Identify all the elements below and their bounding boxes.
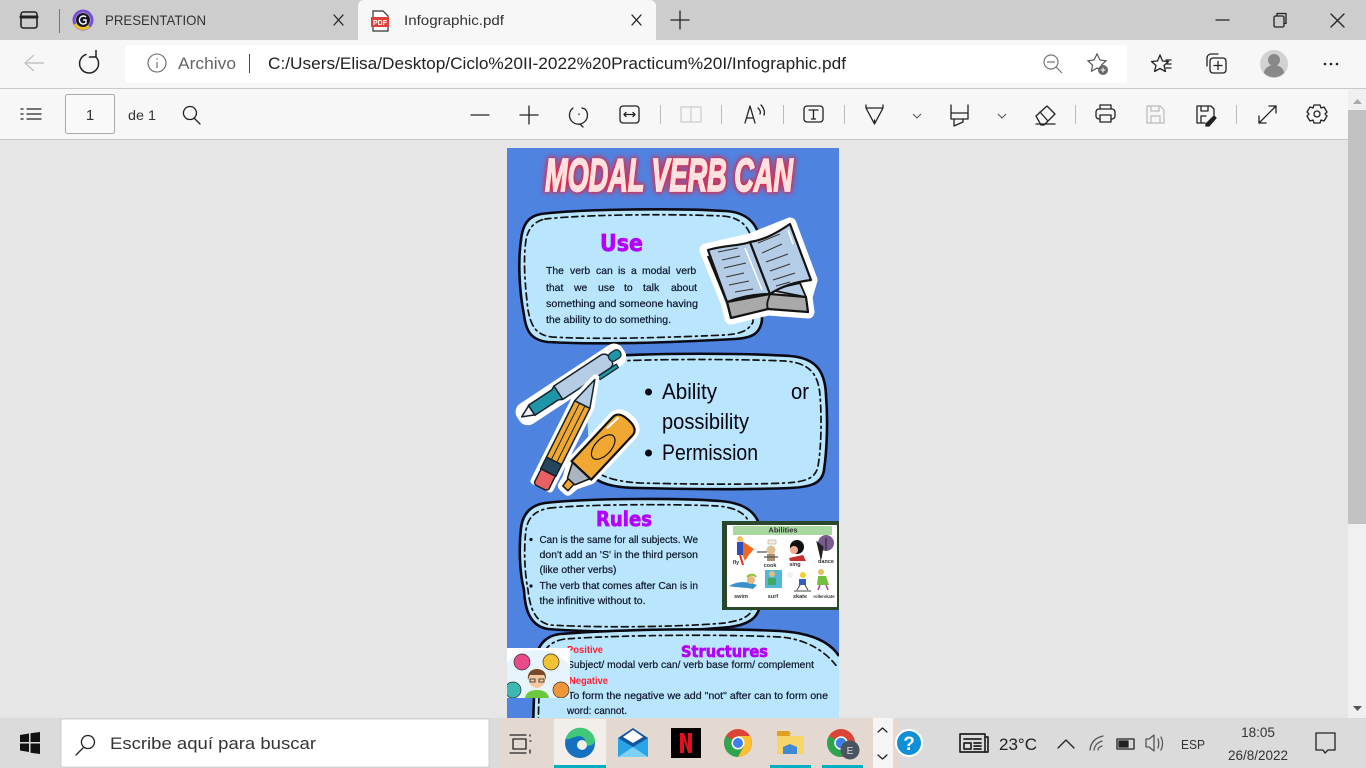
icon: presentation tab logo bbox=[74, 11, 92, 29]
list: uses of can bbox=[662, 383, 809, 460]
time: 18:05 bbox=[1241, 725, 1275, 740]
icon: favourites bbox=[1152, 55, 1171, 72]
icon: news bbox=[960, 734, 988, 752]
use description: verb bbox=[570, 266, 590, 277]
heading: structures: Structures bbox=[681, 642, 768, 661]
date: 26/8/2022 bbox=[1228, 748, 1288, 763]
pdf toolbar bbox=[0, 89, 1366, 140]
use description: use bbox=[598, 283, 615, 294]
panel: ability and permission bbox=[585, 354, 827, 489]
rules text: the infinitive without to. bbox=[540, 596, 646, 607]
label: negative: Negative bbox=[569, 676, 608, 687]
icon: text box bbox=[804, 106, 823, 122]
use description: is bbox=[618, 266, 626, 277]
icon: pdf file: PDF bbox=[373, 20, 388, 27]
system tray icons bbox=[1058, 735, 1162, 751]
figure: fly bbox=[737, 536, 754, 565]
use description: verb bbox=[676, 266, 696, 277]
figure labels bbox=[733, 559, 835, 600]
figure labels: rollerskate bbox=[813, 594, 835, 599]
icon: chrome profile bbox=[827, 729, 860, 760]
language: ESP bbox=[1181, 738, 1205, 752]
rules text: (like other verbs) bbox=[540, 565, 616, 576]
figure: skate bbox=[787, 572, 811, 591]
address bar bbox=[0, 40, 1366, 89]
use description: The bbox=[546, 266, 564, 277]
edge button bbox=[554, 719, 606, 768]
icon: chrome profile: E bbox=[847, 746, 854, 757]
active tab bbox=[358, 0, 656, 40]
figure labels: skate bbox=[793, 594, 807, 600]
use description: we bbox=[573, 283, 588, 294]
tab title: infographic: Infographic.pdf bbox=[404, 12, 504, 28]
figure labels: cook bbox=[764, 563, 777, 569]
figure: rollerskate bbox=[817, 569, 829, 590]
page background bbox=[507, 148, 839, 718]
scrollbar bbox=[1348, 89, 1366, 718]
picture: student with skill icons bbox=[507, 648, 570, 698]
rules text: don't add an 'S' in the third person bbox=[540, 550, 698, 561]
figure: sing bbox=[789, 540, 806, 561]
icon: highlighter bbox=[951, 105, 968, 126]
icon: pencil bbox=[533, 374, 604, 492]
icon: back arrow bbox=[25, 55, 44, 71]
student face bbox=[528, 669, 546, 688]
picture caption: Abilities bbox=[768, 526, 798, 534]
icon: close tab bbox=[334, 15, 343, 25]
use description: something and someone having bbox=[546, 299, 698, 310]
figure: cook bbox=[757, 540, 778, 561]
icon: read aloud bbox=[745, 105, 764, 123]
list bullets bbox=[645, 388, 652, 456]
icon: help bbox=[896, 730, 922, 756]
icon: windows start bbox=[20, 732, 40, 754]
icon: highlighter bbox=[555, 410, 639, 497]
title: MODAL VERB CAN bbox=[545, 149, 793, 201]
panel: use bbox=[519, 209, 762, 343]
security label: Archivo bbox=[178, 55, 236, 73]
figure labels: swim bbox=[734, 594, 748, 600]
label: positive: Positive bbox=[567, 645, 603, 656]
student body bbox=[525, 690, 549, 698]
icon: settings gear bbox=[1307, 105, 1327, 123]
figure labels: fly bbox=[733, 560, 740, 566]
icon: new tab bbox=[671, 11, 689, 29]
use description bbox=[546, 266, 698, 326]
negative structure: To form the negative we add "not" after can to form one bbox=[568, 691, 828, 702]
list: uses of can: Ability bbox=[662, 379, 717, 404]
use description: to bbox=[624, 283, 633, 294]
list: uses of can: possibility bbox=[662, 409, 749, 434]
icon: tab actions bbox=[21, 12, 37, 28]
icon: close active tab bbox=[632, 15, 641, 25]
icons: dropdown chevrons bbox=[913, 114, 1006, 118]
page number box bbox=[66, 94, 114, 134]
window controls bbox=[1216, 14, 1344, 27]
url: C:/Users/Elisa/Desktop/Ciclo%20II-2022%20Practicum%20I/Infographic.pdf bbox=[268, 54, 846, 73]
icon: expand bbox=[1259, 106, 1276, 123]
page count: de 1 bbox=[128, 107, 156, 123]
figure labels: surf bbox=[768, 594, 778, 600]
icon: collections bbox=[1207, 54, 1226, 73]
search prompt: Escribe aquí para buscar bbox=[110, 734, 316, 753]
icon: add favourite bbox=[1088, 54, 1108, 75]
icon: pen bbox=[514, 342, 628, 428]
figure: swim bbox=[729, 575, 757, 589]
browser tab strip bbox=[0, 0, 1366, 40]
icon: mail bbox=[618, 728, 648, 757]
icon: notifications bbox=[1316, 733, 1335, 753]
use description: about bbox=[671, 283, 697, 294]
icon: open book bbox=[706, 224, 811, 318]
icon: disabled page view bbox=[681, 107, 701, 122]
icon: pdf file bbox=[371, 11, 389, 31]
icon: yellow skill bbox=[543, 654, 559, 670]
icon: teal skill bbox=[505, 682, 521, 698]
search box bbox=[61, 719, 489, 767]
heading: rules: Rules bbox=[596, 507, 652, 531]
icon: zoom out bbox=[1044, 55, 1062, 73]
icon: netflix bbox=[671, 728, 701, 758]
rules text bbox=[540, 535, 698, 607]
icon: reload bbox=[80, 50, 99, 73]
icon: help: ? bbox=[903, 734, 915, 755]
panel: structures bbox=[532, 628, 839, 718]
icon: pink skill bbox=[514, 654, 530, 670]
infographic page bbox=[495, 148, 845, 734]
temperature: 23°C bbox=[999, 735, 1037, 754]
icon: save as bbox=[1197, 106, 1216, 126]
icon: more bbox=[1324, 63, 1338, 65]
icon: draw pen bbox=[866, 105, 883, 124]
rules text: Can is the same for all subjects. We bbox=[540, 535, 698, 546]
use description: a bbox=[631, 266, 637, 277]
icon: find bbox=[183, 106, 200, 124]
negative structure continued: word: cannot. bbox=[566, 706, 627, 717]
windows taskbar bbox=[0, 718, 1366, 768]
icon: print bbox=[1096, 105, 1115, 122]
tab title: presentation: PRESENTATION bbox=[105, 12, 206, 28]
use description: modal bbox=[642, 266, 670, 277]
icon: eraser bbox=[1036, 106, 1055, 125]
zoom and fit tools bbox=[471, 106, 639, 127]
icon: task view bbox=[510, 735, 531, 753]
panel: rules bbox=[520, 499, 761, 631]
use description: that bbox=[546, 283, 563, 294]
toolbar dividers bbox=[660, 105, 1236, 124]
taskbar overflow bbox=[873, 718, 893, 768]
figure: surf bbox=[765, 570, 782, 588]
use description: can bbox=[596, 266, 613, 277]
figure labels: dance bbox=[818, 559, 834, 565]
icon: edge bbox=[565, 728, 595, 758]
icon: chrome bbox=[724, 729, 752, 757]
positive structure: Subject/ modal verb can/ verb base form/ complement bbox=[567, 660, 814, 671]
edge active marker bbox=[554, 765, 606, 768]
rule bullets bbox=[529, 538, 533, 588]
page number: 1 bbox=[86, 107, 94, 124]
icon: file explorer bbox=[777, 731, 804, 754]
picture: abilities bbox=[722, 521, 839, 610]
use description: the ability to do something. bbox=[546, 315, 671, 326]
icons: pinned app markers bbox=[770, 765, 863, 768]
figure: dance bbox=[817, 535, 834, 559]
viewer background bbox=[0, 140, 1366, 718]
icon: search bbox=[76, 736, 94, 755]
list: uses of can: Permission bbox=[662, 440, 758, 465]
icon: info bbox=[148, 54, 166, 72]
icon: profile bbox=[1260, 50, 1288, 78]
figure labels: sing bbox=[789, 562, 801, 568]
use description: talk bbox=[643, 283, 660, 294]
rules text: The verb that comes after Can is in bbox=[540, 581, 698, 592]
icon: orange skill bbox=[553, 682, 569, 698]
heading: use: Use bbox=[600, 231, 643, 257]
list: uses of can: or bbox=[791, 379, 809, 404]
icon: contents list bbox=[21, 109, 41, 119]
icon: save disabled bbox=[1147, 106, 1164, 123]
